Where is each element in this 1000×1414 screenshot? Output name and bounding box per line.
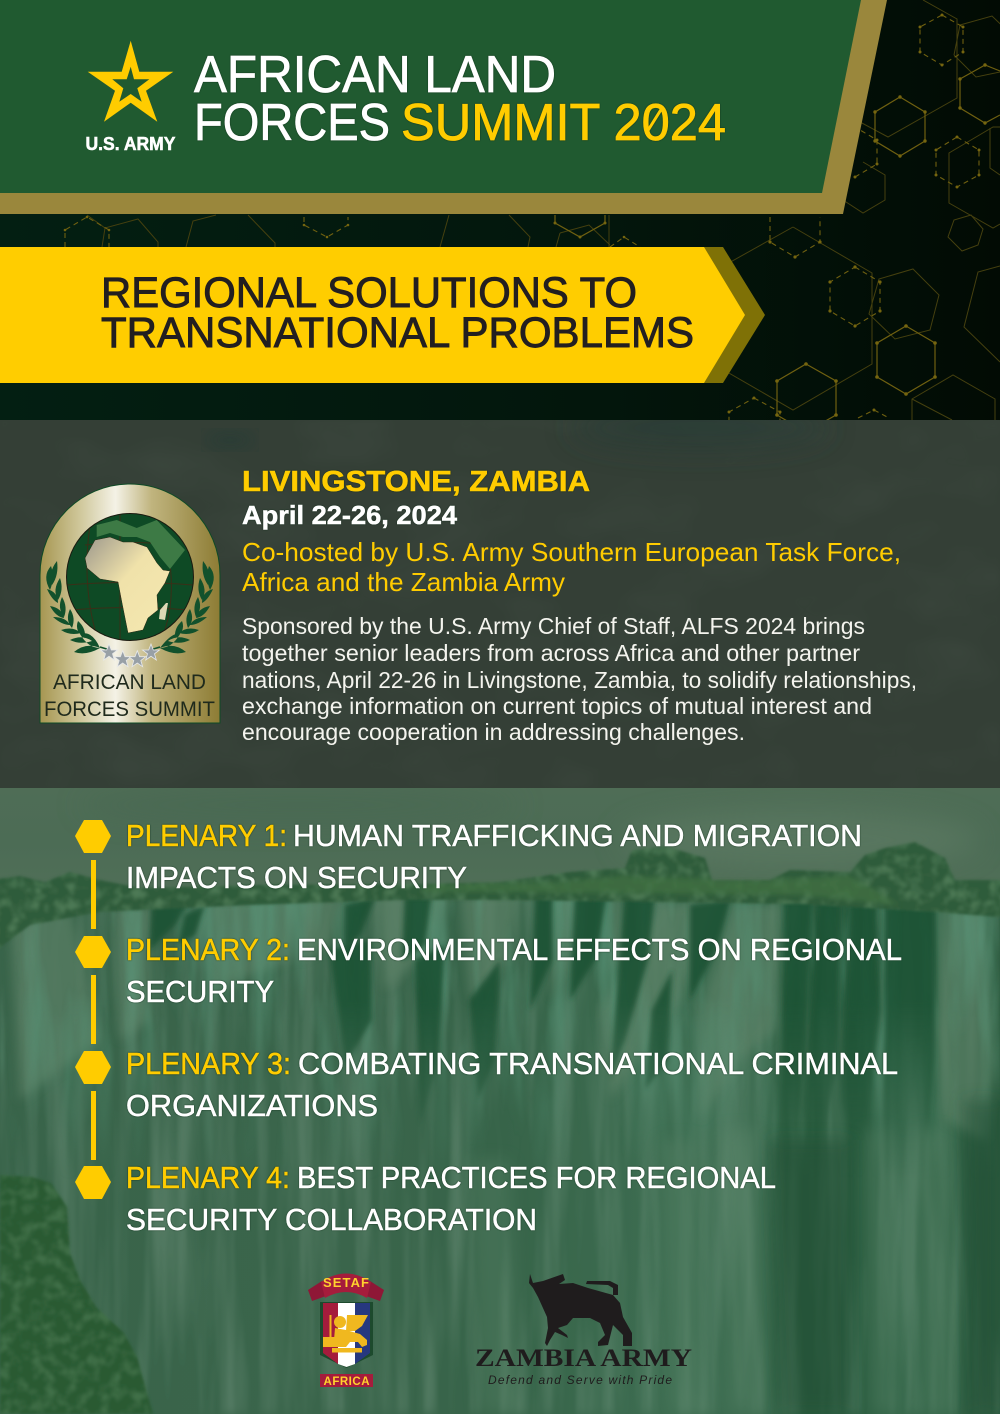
left foreground cliff xyxy=(0,1170,160,1414)
broad soft streaks lower down xyxy=(470,1130,952,1414)
marker 1 xyxy=(75,820,111,853)
connector 2 xyxy=(91,975,96,1044)
waterfall xyxy=(0,880,1000,1414)
title: SUMMIT 2024 xyxy=(401,94,726,152)
icon: U.S. Army star logo xyxy=(86,41,176,154)
icon: U.S. Army star logo: U.S. ARMY xyxy=(86,133,176,154)
banner heading xyxy=(101,269,694,357)
header panel: green field xyxy=(0,0,861,193)
co-host line xyxy=(242,537,901,597)
plenary 2 xyxy=(126,932,902,1009)
silver stars xyxy=(100,644,160,667)
plenary 2: PLENARY 2: xyxy=(126,932,290,967)
treeline xyxy=(0,842,1000,946)
dark rock between falls xyxy=(28,899,999,1148)
description paragraph xyxy=(242,613,917,745)
plenary 4: BEST PRACTICES FOR REGIONAL xyxy=(297,1160,776,1195)
event location and date xyxy=(242,466,590,530)
banner heading: TRANSNATIONAL PROBLEMS xyxy=(101,309,694,357)
description paragraph: Sponsored by the U.S. Army Chief of Staff, ALFS 2024 brings xyxy=(242,613,865,639)
title xyxy=(194,46,726,152)
plenary 3 xyxy=(126,1046,898,1123)
connector 3 xyxy=(91,1091,96,1160)
title: FORCES xyxy=(194,94,390,152)
hexagon network pattern xyxy=(65,0,1000,455)
header panel: gold border xyxy=(0,0,887,214)
logo: Zambia Army: ZAMBIA ARMY xyxy=(475,1345,692,1372)
logo: SETAF Africa xyxy=(308,1274,384,1388)
plenary 1 xyxy=(126,818,862,895)
title: AFRICAN LAND xyxy=(194,46,556,104)
arrow banner: shadow chevron xyxy=(704,247,765,383)
light water near lip xyxy=(10,892,995,1140)
description paragraph: nations, April 22-26 in Livingstone, Zambia, to solidify relationships, xyxy=(242,667,917,693)
panel: location and overview xyxy=(0,406,1000,788)
event location and date: April 22-26, 2024 xyxy=(242,500,458,530)
badge: African Land Forces Summit xyxy=(40,484,220,723)
marker 3 xyxy=(75,1051,111,1084)
background: dark hexagon header zone xyxy=(0,0,1000,455)
description paragraph: together senior leaders from across Africa and other partner xyxy=(242,640,860,666)
plenary 4: SECURITY COLLABORATION xyxy=(126,1202,537,1237)
logo: Zambia Army: Defend and Serve with Pride xyxy=(488,1373,672,1387)
plenary 4: PLENARY 4: xyxy=(126,1160,290,1195)
plenary 2: SECURITY xyxy=(126,974,274,1009)
arrow banner: yellow xyxy=(0,247,745,383)
logo: SETAF Africa: SETAF xyxy=(323,1275,369,1290)
plenary 2: ENVIRONMENTAL EFFECTS ON REGIONAL xyxy=(297,932,902,967)
plenary 1: IMPACTS ON SECURITY xyxy=(126,860,467,895)
plenary 3: ORGANIZATIONS xyxy=(126,1088,378,1123)
badge: African Land Forces Summit: AFRICAN LAND xyxy=(53,671,206,694)
plenary 4 xyxy=(126,1160,776,1237)
co-host line: Co-hosted by U.S. Army Southern European Task Force, xyxy=(242,537,901,567)
background photo: waterfall with green overlay xyxy=(0,788,1000,1414)
plenary 1: HUMAN TRAFFICKING AND MIGRATION xyxy=(293,818,862,853)
description paragraph: encourage cooperation in addressing challenges. xyxy=(242,719,745,745)
description paragraph: exchange information on current topics of mutual interest and xyxy=(242,693,872,719)
marker 2 xyxy=(75,936,111,968)
logo: Zambia Army xyxy=(475,1274,692,1387)
logo: SETAF Africa: AFRICA xyxy=(324,1376,370,1388)
connector 1 xyxy=(91,860,96,929)
badge: African Land Forces Summit: FORCES SUMMIT xyxy=(44,698,215,721)
plenary 3: COMBATING TRANSNATIONAL CRIMINAL xyxy=(298,1046,898,1081)
plenary timeline: hexagon markers and connectors xyxy=(75,820,111,1199)
marker 4 xyxy=(75,1166,111,1199)
event location and date: LIVINGSTONE, ZAMBIA xyxy=(242,466,590,498)
globe xyxy=(66,513,194,641)
banner heading: REGIONAL SOLUTIONS TO xyxy=(101,269,637,317)
plenary 1: PLENARY 1: xyxy=(126,818,287,853)
co-host line: Africa and the Zambia Army xyxy=(242,567,565,597)
plenary 3: PLENARY 3: xyxy=(126,1046,291,1081)
laurel wreath xyxy=(46,561,214,653)
